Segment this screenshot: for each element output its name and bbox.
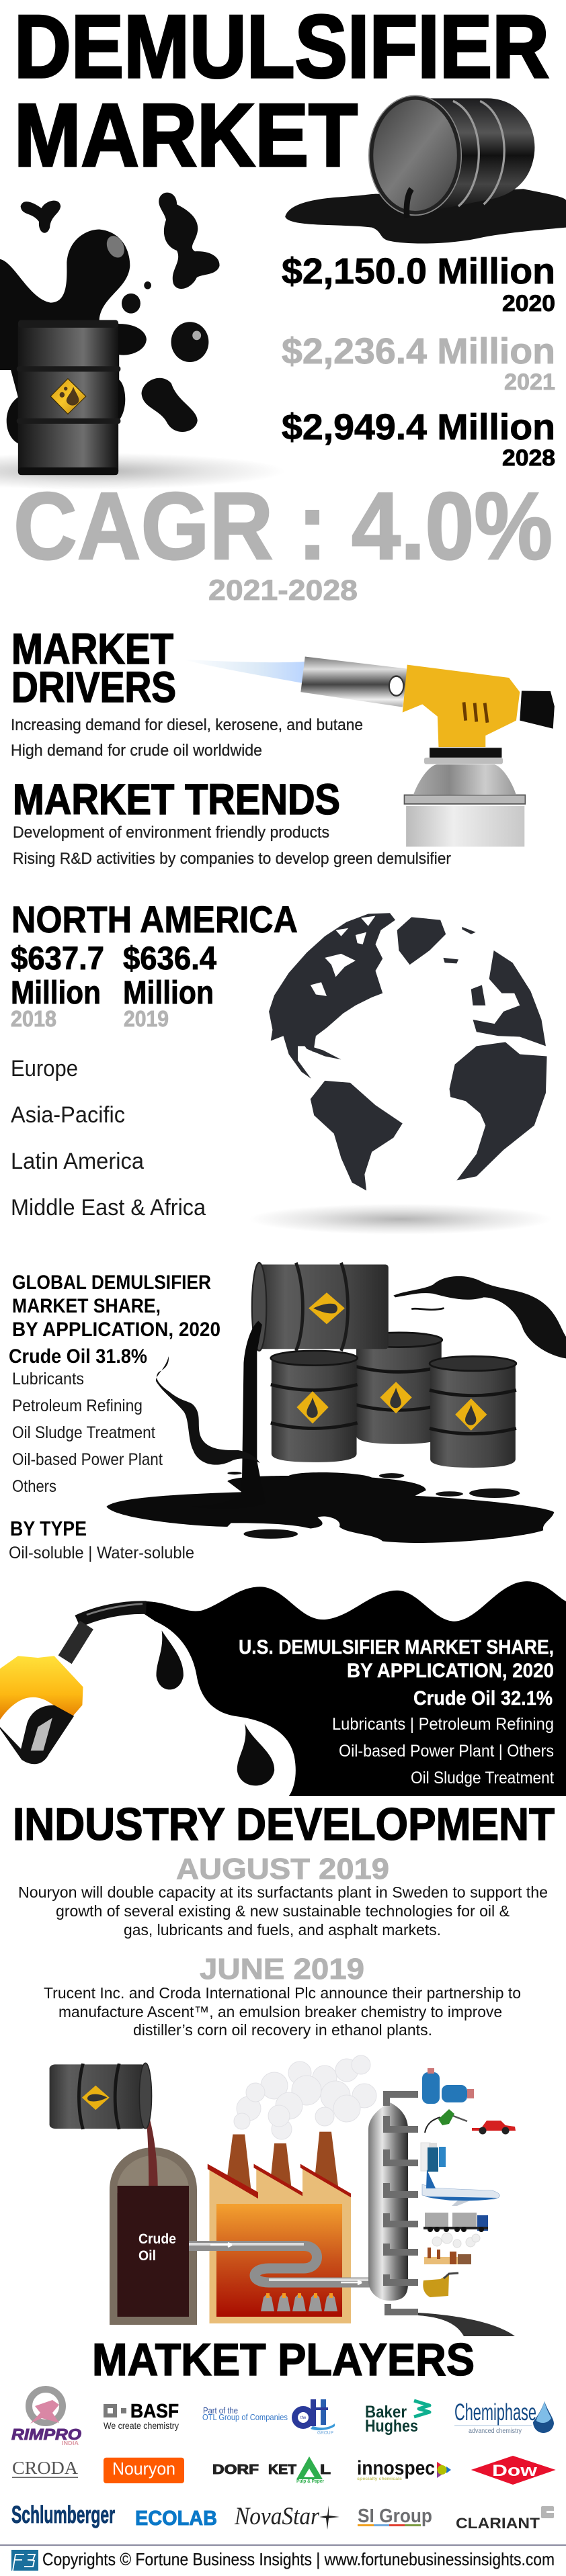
other regions: Asia-Pacific — [11, 1102, 125, 1128]
logo: Croda: CRODA — [12, 2458, 79, 2478]
logo: Rimpro India — [11, 2389, 81, 2446]
heading — [239, 1636, 554, 1682]
heading: North America: NORTH AMERICA — [11, 898, 298, 940]
segment list: Oil-based Power Plant | Others — [339, 1742, 554, 1761]
logo: Nouryon: Nouryon — [112, 2458, 175, 2479]
U.S. market share text — [239, 1636, 554, 1787]
market player logos — [11, 2389, 556, 2532]
logo: Baker Hughes: Baker — [365, 2403, 407, 2422]
logo: BASF: We create chemistry — [104, 2420, 179, 2431]
logo: Chemiphase — [454, 2399, 554, 2435]
storage tank — [110, 2147, 197, 2325]
segment list: Oil Sludge Treatment — [411, 1769, 554, 1787]
icon: truck — [423, 2213, 488, 2232]
heading: market players: MATKET PLAYERS — [92, 2334, 475, 2385]
lead segment: Crude Oil 31.8% — [9, 1345, 147, 1368]
figure 2028 — [282, 407, 555, 471]
figure 2020 — [282, 251, 555, 316]
regional figures — [11, 898, 298, 1220]
heading — [12, 1272, 220, 1341]
logo: Dorf Ketal: L — [320, 2462, 331, 2477]
development: June 2019 — [44, 1953, 521, 2039]
figure 2021: $2,236.4 Million — [282, 331, 555, 371]
logo: Dow — [471, 2456, 556, 2485]
by type: Oil-soluble | Water-soluble — [9, 1544, 194, 1562]
development: June 2019: Trucent Inc. and Croda International Plc announce their partnership to — [44, 1984, 521, 2002]
figure 2021 — [282, 331, 555, 395]
heading: GLOBAL DEMULSIFIER — [12, 1272, 211, 1294]
by type — [9, 1517, 194, 1562]
smoke — [234, 2055, 376, 2139]
other regions: Middle East & Africa — [11, 1195, 206, 1220]
logo: Schlumberger: Schlumberger — [11, 2501, 115, 2528]
figure 2020: 2020 — [502, 291, 555, 316]
logo: Clariant — [456, 2506, 554, 2532]
development: August 2019: Nouryon will double capacity at its surfactants plant in Sweden to support the — [18, 1883, 548, 1901]
icon: mini factory — [424, 2233, 480, 2264]
development: June 2019: JUNE 2019 — [200, 1953, 364, 1986]
logo: Clariant: CLARIANT — [456, 2515, 540, 2532]
value 2018: $637.7 — [11, 941, 104, 977]
logo: NovaStar: NovaStar — [234, 2503, 320, 2530]
logo: Baker Hughes — [365, 2401, 430, 2436]
illustration: oil splash and barrel — [0, 193, 285, 490]
segment list — [332, 1715, 554, 1787]
figure 2021: 2021 — [504, 369, 555, 395]
segment list: Oil Sludge Treatment — [12, 1423, 155, 1442]
icon: oil can — [423, 2273, 458, 2297]
development: June 2019: manufacture Ascent™, an emulsion breaker chemistry to improve — [58, 2003, 502, 2020]
market trends: MARKET TRENDS — [13, 775, 340, 824]
logo: Dorf Ketal — [212, 2456, 331, 2484]
market drivers: DRIVERS — [11, 663, 176, 711]
chart: global market share by application — [9, 1272, 220, 1562]
market drivers — [11, 625, 363, 760]
logo: the DTL group: Part of the — [203, 2406, 238, 2415]
other regions: Latin America — [11, 1149, 144, 1174]
icon: gas cylinders — [422, 2068, 474, 2104]
segment list: Lubricants — [12, 1370, 84, 1388]
value 2019: 2019 — [124, 1006, 169, 1031]
factory — [189, 2132, 370, 2323]
logo: the DTL group — [202, 2399, 335, 2436]
market drivers: High demand for crude oil worldwide — [11, 742, 262, 760]
development: August 2019: growth of several existing & new sustainable technologies for oil & — [56, 1902, 510, 1920]
logo: BASF: BASF — [130, 2401, 179, 2422]
logo: Innospec: innospec — [357, 2457, 435, 2479]
logo: the DTL group: the — [300, 2416, 307, 2420]
segment list: Lubricants | Petroleum Refining — [332, 1715, 554, 1734]
value 2018: Million — [11, 975, 101, 1011]
logo: the DTL group: OTL Group of Companies — [202, 2413, 288, 2422]
logo: Innospec: specialty chemicals — [357, 2477, 402, 2481]
storage tank: Oil — [138, 2248, 156, 2264]
logo: Dorf Ketal: Pulp & Paper — [296, 2479, 324, 2484]
icon: airplane — [422, 2170, 499, 2206]
segment list: Oil-based Power Plant — [12, 1450, 163, 1469]
illustration: stacked oil barrels and spill — [106, 1263, 566, 1543]
illustration: crude oil refining process — [50, 2055, 516, 2336]
icon: Fortune Business Insights logo — [11, 2550, 38, 2571]
logo: the DTL group: GROUP — [317, 2431, 333, 2436]
value 2019 — [123, 941, 216, 1031]
illustration: gas torch — [182, 657, 555, 847]
logo: SI Group: SI Group — [358, 2505, 432, 2527]
other regions — [11, 1056, 206, 1220]
pouring barrel — [50, 2063, 158, 2186]
distillation column — [368, 2094, 418, 2312]
market drivers: MARKET — [11, 625, 173, 673]
value 2018: 2018 — [11, 1006, 56, 1031]
segment list: Others — [12, 1477, 56, 1496]
segment list — [12, 1370, 163, 1496]
logo: Ecolab: ECOLAB — [135, 2506, 217, 2530]
value 2018 — [11, 941, 104, 1031]
market drivers: Increasing demand for diesel, kerosene, and butane — [11, 716, 363, 734]
illustration: globe — [249, 913, 553, 1235]
development: August 2019: AUGUST 2019 — [176, 1853, 389, 1885]
value 2019: $636.4 — [123, 941, 216, 977]
development: June 2019: distiller’s corn oil recovery in ethanol plants. — [133, 2021, 432, 2039]
lead segment: Crude Oil 32.1% — [413, 1687, 553, 1709]
development: August 2019: gas, lubricants and fuels, and asphalt markets. — [124, 1921, 441, 1939]
by type: BY TYPE — [10, 1517, 87, 1540]
CAGR callout: 2021-2028 — [208, 574, 358, 607]
logo: Nouryon — [104, 2458, 184, 2483]
title — [14, 0, 549, 185]
figure 2020: $2,150.0 Million — [282, 251, 555, 292]
storage tank: Crude — [138, 2231, 176, 2247]
logo: Rimpro India: RIMPRO — [11, 2426, 81, 2443]
logo: Rimpro India: INDIA — [62, 2440, 79, 2446]
heading: BY APPLICATION, 2020 — [347, 1660, 554, 1682]
market trends: Rising R&D activities by companies to develop green demulsifier — [13, 850, 451, 868]
development: August 2019 — [18, 1853, 548, 1939]
market trends: Development of environment friendly products — [13, 824, 329, 842]
logo: Dow: Dow — [492, 2462, 537, 2480]
heading: BY APPLICATION, 2020 — [12, 1319, 220, 1341]
logo: Dorf Ketal: KET — [268, 2462, 296, 2477]
logo: Baker Hughes: Hughes — [365, 2417, 418, 2436]
icon: chemical bottles — [421, 2143, 446, 2172]
icon: fuel pump and car — [425, 2109, 516, 2135]
other regions: Europe — [11, 1056, 78, 1081]
market size figures — [282, 251, 555, 471]
heading: MARKET SHARE, — [12, 1295, 161, 1317]
logo: BASF — [104, 2401, 179, 2431]
figure 2028: $2,949.4 Million — [282, 407, 555, 447]
illustration: oil wave panel and fuel nozzle — [0, 1581, 566, 1796]
icon: road — [418, 2313, 515, 2336]
title: MARKET — [14, 86, 358, 185]
illustration: tipped oil barrel with spill — [285, 95, 566, 244]
figure 2028: 2028 — [502, 445, 555, 471]
logo: Chemiphase: advanced chemistry — [469, 2428, 522, 2435]
logo: Dorf Ketal: DORF — [212, 2462, 259, 2477]
segment list: Petroleum Refining — [12, 1396, 143, 1415]
value 2019: Million — [123, 975, 214, 1011]
market trends — [13, 775, 451, 868]
